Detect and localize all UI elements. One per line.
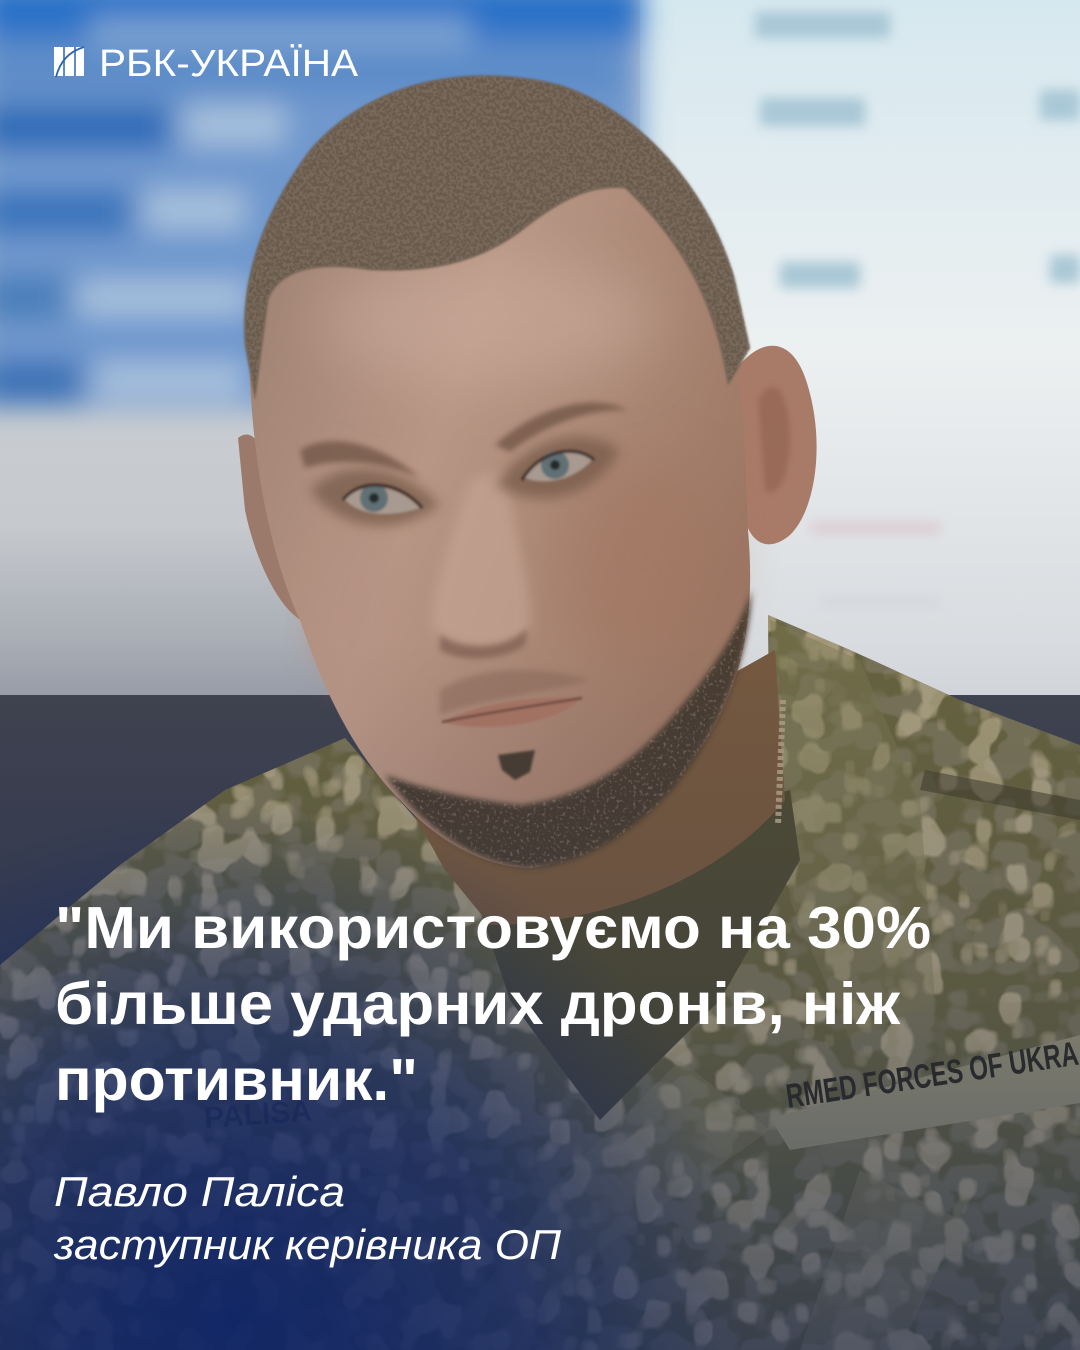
blurred labels on the right of the screen <box>755 12 1080 607</box>
speaker name: Павло Паліса <box>54 1168 345 1215</box>
beard <box>380 585 755 870</box>
ear: right <box>725 346 817 544</box>
forehead highlight <box>320 255 660 385</box>
quote line 2: більше ударних дронів, ніж <box>55 971 901 1037</box>
undershirt <box>470 790 800 1120</box>
bottom gradient overlay <box>0 640 1080 1350</box>
mouth <box>442 697 582 727</box>
brow: left <box>300 441 420 478</box>
left cheek <box>305 530 405 690</box>
logo icon <box>54 47 84 77</box>
eye socket shadow: left <box>310 469 440 526</box>
blue chart block on the screen <box>0 0 642 408</box>
screen right side <box>640 0 1080 700</box>
camouflage texture <box>0 600 1080 1350</box>
dark desk <box>0 695 1080 1350</box>
hair texture <box>244 76 750 399</box>
logo <box>54 43 359 85</box>
chest patch <box>770 1035 1080 1150</box>
quote line 3: противник." <box>55 1047 418 1113</box>
brow: right <box>495 403 628 452</box>
eye socket shadow: right <box>495 437 620 498</box>
attribution <box>53 1168 562 1268</box>
quote line 1: "Ми використовуємо на 30% <box>55 895 931 961</box>
logo wordmark: РБК-УКРАЇНА <box>99 43 359 85</box>
cheek shading <box>555 460 725 660</box>
speaker role: заступник керівника ОП <box>53 1221 562 1268</box>
moustache shadow <box>440 670 590 715</box>
eye: left <box>343 484 422 514</box>
name tape: PALISA <box>203 1095 313 1135</box>
eye: right <box>522 451 594 481</box>
uniform <box>0 600 1080 1350</box>
beard stubble texture <box>386 607 750 868</box>
nose <box>432 470 531 658</box>
soul patch <box>498 750 535 780</box>
face <box>250 170 755 870</box>
hair <box>242 74 752 400</box>
ear: left <box>238 435 305 622</box>
navy glow, lower left <box>0 790 760 1350</box>
necklace chain <box>778 700 783 825</box>
neck <box>400 650 785 925</box>
quote heading <box>55 895 931 1113</box>
